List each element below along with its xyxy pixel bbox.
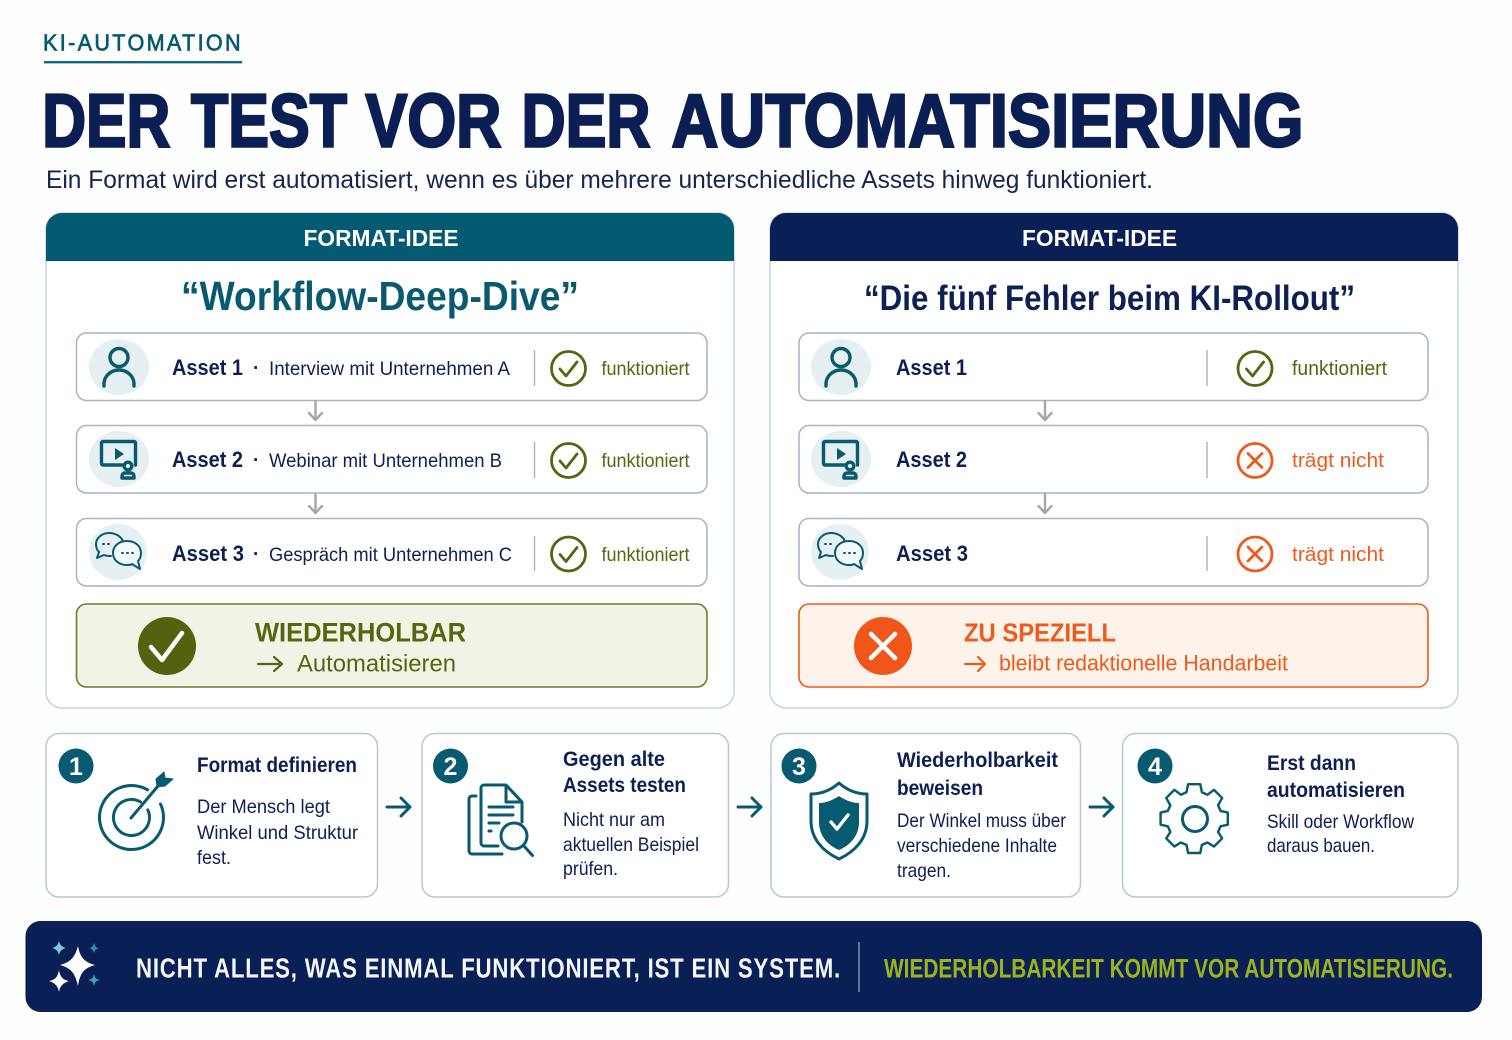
step 2 description: prüfen.	[563, 858, 618, 880]
icon: gear	[1161, 784, 1228, 853]
arrow: down	[309, 401, 322, 420]
step 3 description: Der Winkel muss über	[897, 810, 1066, 832]
arrow: down	[1038, 494, 1052, 513]
format name: Die fünf Fehler beim KI-Rollout: “Die fünf Fehler beim KI-Rollout”	[864, 279, 1355, 318]
asset row 1	[76, 333, 707, 400]
title: DER	[522, 78, 650, 162]
number badge 4	[1138, 748, 1172, 784]
subtitle: Ein Format wird erst automatisiert, wenn es über mehrere unterschiedliche Assets hinweg funktioniert.	[46, 166, 1153, 194]
status: funktioniert	[552, 352, 690, 386]
step 3: Wiederholbarkeit beweisen	[771, 734, 1080, 897]
status: funktioniert: funktioniert	[602, 544, 690, 566]
step 1 description	[197, 796, 358, 869]
status: funktioniert: funktioniert	[602, 358, 690, 380]
result: wiederholbar: WIEDERHOLBAR	[255, 618, 466, 648]
panel header: right: FORMAT-IDEE	[1022, 225, 1177, 251]
number badge 3: 3	[792, 753, 806, 781]
panel: Die fünf Fehler beim KI-Rollout	[770, 213, 1458, 708]
status: trägt nicht: trägt nicht	[1292, 449, 1384, 472]
title	[42, 78, 1304, 162]
asset row 3: Asset 3	[172, 541, 244, 566]
result: zu speziell	[799, 604, 1428, 687]
number badge 1: 1	[69, 753, 83, 781]
step 3 description: tragen.	[897, 860, 951, 882]
status: funktioniert: funktioniert	[602, 450, 690, 472]
number badge 1	[58, 748, 94, 784]
result: wiederholbar	[76, 604, 707, 687]
step 1: Format definieren	[46, 734, 378, 897]
step 2 description	[563, 809, 699, 880]
arrow: down	[309, 494, 322, 513]
asset row 1: Interview mit Unternehmen A	[269, 358, 510, 380]
step 4: Erst dann automatisieren	[1122, 734, 1458, 897]
arrow: down	[1038, 401, 1052, 420]
status: funktioniert: funktioniert	[1292, 358, 1387, 380]
icon: sparkles	[49, 941, 100, 992]
step 3: Wiederholbarkeit beweisen: Wiederholbarkeit	[897, 748, 1058, 772]
arrow: step 2 to 3	[738, 798, 761, 816]
step 2: Gegen alte Assets testen: Assets testen	[563, 773, 686, 797]
step 3 description: verschiedene Inhalte	[897, 835, 1057, 857]
icon: orange cross badge	[854, 617, 912, 675]
asset row 2: ·	[253, 450, 259, 471]
number badge 2	[433, 748, 468, 784]
step 1: Format definieren: Format definieren	[197, 753, 357, 777]
icon: olive check badge	[138, 617, 196, 675]
status: funktioniert	[552, 537, 690, 571]
asset row 3: Asset 3	[896, 541, 968, 566]
step 3 description	[897, 810, 1066, 882]
eyebrow: KI-Automation: KI-AUTOMATION	[43, 30, 243, 56]
icon: chat bubbles	[89, 524, 147, 580]
result: wiederholbar: Automatisieren	[297, 650, 456, 678]
asset row 1: Asset 1	[896, 355, 967, 380]
result: zu speziell: ZU SPEZIELL	[964, 618, 1116, 648]
icon: chat bubbles	[811, 524, 869, 580]
number badge 2: 2	[444, 753, 457, 781]
status: trägt nicht	[1238, 537, 1384, 571]
icon: arrow right	[965, 657, 985, 671]
bottom banner	[26, 921, 1482, 1012]
asset row 3: ·	[253, 544, 259, 565]
asset row 3	[76, 518, 707, 586]
step 2: Gegen alte Assets testen: Gegen alte	[563, 747, 665, 771]
title: TEST	[191, 78, 347, 162]
title: VOR	[366, 78, 502, 162]
status: funktioniert	[552, 444, 690, 478]
panel header: right	[770, 213, 1458, 261]
asset row 2: Asset 2	[896, 447, 967, 472]
asset row 2	[76, 426, 707, 493]
asset row 3	[799, 518, 1428, 586]
step 2 description: Nicht nur am	[563, 809, 665, 831]
icon: shield with check	[811, 783, 867, 859]
asset row 1: Asset 1	[172, 355, 243, 380]
icon: person	[89, 339, 149, 395]
asset row 3: Gespräch mit Unternehmen C	[269, 544, 512, 566]
title: AUTOMATISIERUNG	[672, 78, 1304, 162]
title: DER	[42, 78, 170, 162]
step 4 description	[1267, 811, 1415, 857]
asset row 2: Asset 2	[172, 447, 243, 472]
format name: Workflow-Deep-Dive: “Workflow-Deep-Dive”	[181, 273, 579, 319]
arrow: step 1 to 2	[387, 798, 410, 816]
step 2: Gegen alte Assets testen	[422, 734, 728, 897]
number badge 3	[782, 748, 816, 784]
status: trägt nicht: trägt nicht	[1292, 543, 1384, 566]
step 1 description: Winkel und Struktur	[197, 822, 358, 844]
arrow: step 3 to 4	[1090, 798, 1113, 816]
asset row 1: ·	[253, 358, 259, 379]
icon: person	[811, 339, 871, 395]
step 3: Wiederholbarkeit beweisen: beweisen	[897, 776, 983, 800]
step 4: Erst dann automatisieren: Erst dann	[1267, 751, 1356, 775]
icon: webinar screen	[811, 431, 871, 487]
asset row 1	[799, 333, 1428, 400]
panel header: left: FORMAT-IDEE	[304, 225, 458, 251]
icon: webinar screen	[89, 431, 149, 487]
step 4 description: daraus bauen.	[1267, 835, 1375, 857]
panel header: left	[46, 213, 734, 261]
panel: Workflow-Deep-Dive	[46, 213, 734, 708]
step 4 description: Skill oder Workflow	[1267, 811, 1415, 833]
icon: target	[99, 772, 173, 850]
status: trägt nicht	[1238, 444, 1384, 478]
number badge 4: 4	[1148, 753, 1162, 781]
step 1 description: fest.	[197, 847, 231, 869]
status: funktioniert	[1238, 352, 1387, 386]
asset row 2: Webinar mit Unternehmen B	[269, 450, 502, 472]
step 4: Erst dann automatisieren: automatisieren	[1267, 778, 1405, 802]
result: zu speziell: bleibt redaktionelle Handarbeit	[999, 650, 1288, 676]
step 1 description: Der Mensch legt	[197, 796, 331, 818]
asset row 2	[799, 426, 1428, 493]
icon: documents with magnifier	[469, 785, 532, 856]
step 2 description: aktuellen Beispiel	[563, 834, 699, 856]
bottom banner: NICHT ALLES, WAS EINMAL FUNKTIONIERT, IST EIN SYSTEM.	[136, 952, 841, 984]
icon: arrow right	[258, 657, 282, 671]
